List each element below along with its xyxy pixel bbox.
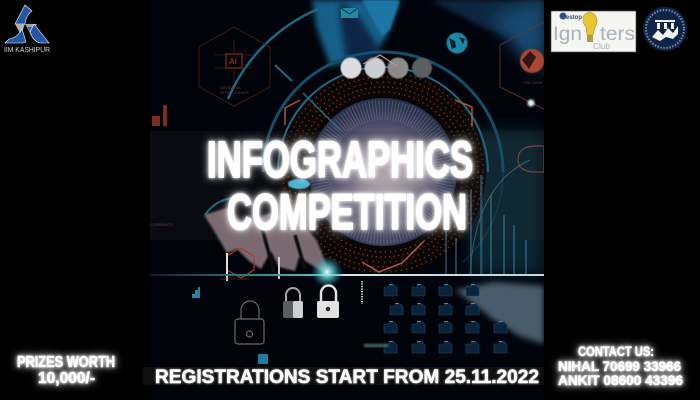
lock: outline bbox=[235, 301, 264, 344]
red chevron line bbox=[362, 241, 424, 272]
icon: artificial intelligence hexagon bbox=[199, 27, 270, 106]
title: infographics competition bbox=[207, 131, 473, 240]
contact details bbox=[558, 343, 683, 388]
icon: artificial intelligence hexagon: Ai bbox=[229, 57, 237, 66]
blue blob and arc bbox=[150, 179, 310, 227]
logo: round club badge bbox=[643, 7, 687, 51]
prizes callout: 10,000/- bbox=[38, 370, 95, 387]
logo: IIM Kashipur: IIM KASHIPUR bbox=[4, 47, 50, 54]
logo: Igniters Club: Club bbox=[593, 41, 610, 51]
background photo: technology scene bbox=[150, 0, 544, 400]
icon: globe blue bbox=[446, 32, 468, 54]
icon: artificial intelligence hexagon: ARTIFICIAL bbox=[220, 85, 242, 90]
logo: Igniters Club: Ign bbox=[553, 24, 582, 45]
prizes callout: PRIZES WORTH bbox=[17, 354, 115, 371]
glowing touch point bbox=[311, 256, 343, 288]
row of four white circles with zig-zag line bbox=[340, 55, 432, 78]
icon: red bar chart bbox=[152, 105, 167, 126]
title: infographics competition: COMPETITION bbox=[227, 184, 467, 240]
contact details: NIHAL 70699 33966 bbox=[558, 359, 681, 374]
pink brain icon bbox=[518, 146, 544, 172]
logo: Igniters Club: estop bbox=[566, 15, 582, 21]
icon: artificial intelligence hexagon: INTELLIGENCE bbox=[220, 90, 249, 95]
suit and shirt bbox=[312, 0, 544, 275]
logo: Igniters Club: ters bbox=[600, 24, 635, 45]
small blue chart icon bbox=[192, 287, 200, 298]
small blue bar icon bbox=[258, 354, 268, 364]
title: infographics competition: INFOGRAPHICS bbox=[207, 131, 473, 188]
contact details: ANKIT 08600 43396 bbox=[558, 373, 683, 388]
registration date line: REGISTRATIONS START FROM 25.11.2022 bbox=[155, 367, 539, 388]
icon: globe red with hexagon: BIG DATA bbox=[524, 80, 542, 85]
contact details: CONTACT US: bbox=[578, 343, 654, 359]
logo: IIM Kashipur bbox=[4, 5, 50, 54]
translucent band behind title bbox=[278, 131, 489, 240]
right blurred hand bbox=[455, 282, 544, 344]
globe rings and dotted dome bbox=[228, 9, 503, 275]
pointing hand bbox=[204, 207, 327, 281]
lock: half filled bbox=[283, 288, 303, 318]
icon: mail bbox=[341, 8, 358, 18]
light-blue chart bars bbox=[445, 160, 530, 275]
horizontal light line bbox=[150, 274, 544, 276]
icon: globe red with hexagon bbox=[500, 22, 544, 109]
vertical dotted line bbox=[361, 281, 363, 304]
pointing hand: SUPPLY CHAIN bbox=[220, 276, 249, 281]
band behind registration text bbox=[143, 367, 544, 385]
folder grid bbox=[364, 284, 507, 353]
blue blob and arc: CURRENCY bbox=[150, 222, 173, 227]
logo: Igniters Club bbox=[551, 11, 636, 52]
lock: filled bbox=[317, 286, 339, 318]
prizes callout bbox=[17, 354, 115, 387]
